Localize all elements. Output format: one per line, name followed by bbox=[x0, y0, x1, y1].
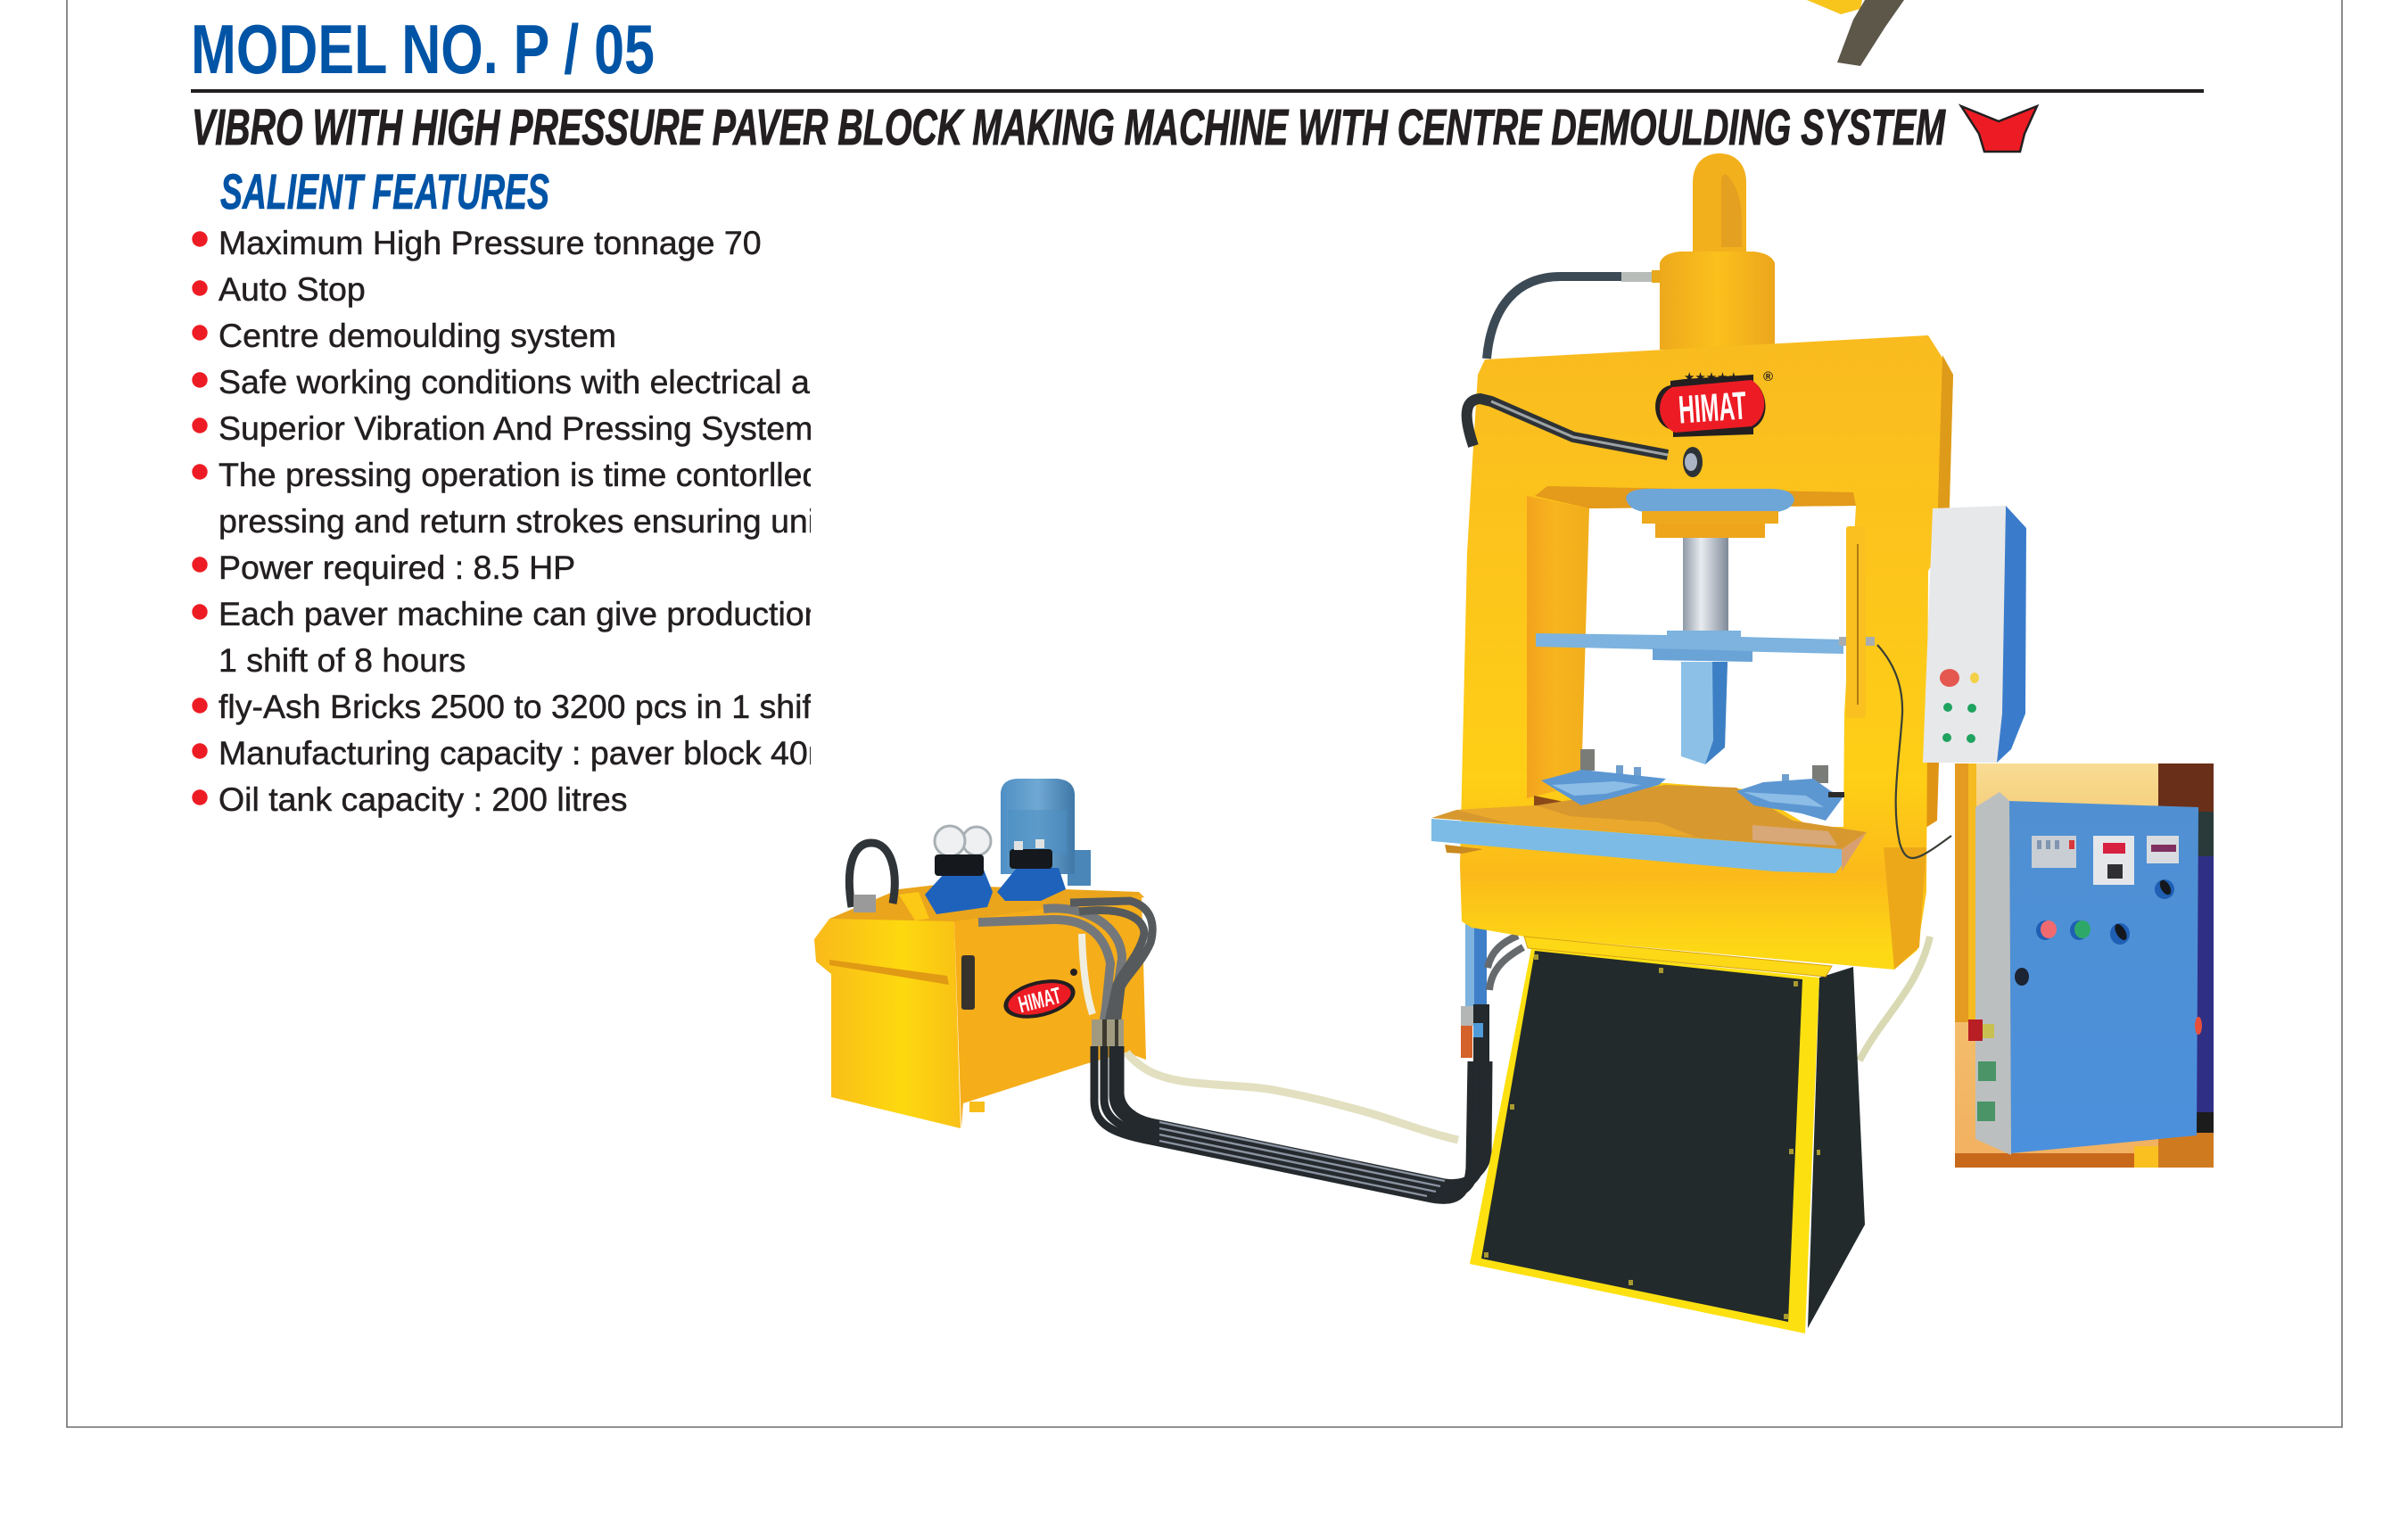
press control box bbox=[1923, 506, 2026, 763]
press bed bbox=[1431, 785, 1867, 873]
meter 3 bbox=[2147, 836, 2179, 863]
meter 2 bbox=[2093, 836, 2134, 885]
tank beige drain bbox=[1082, 934, 1093, 1014]
side terminals bbox=[1977, 1061, 1996, 1121]
inset background bbox=[1955, 764, 2214, 1168]
frame front bbox=[1460, 335, 1953, 970]
feature lines bbox=[219, 224, 836, 818]
heading: salient features: SALIENT FEATURES bbox=[220, 163, 549, 219]
selector knob top bbox=[2155, 879, 2174, 899]
panel side bbox=[1975, 792, 2011, 1155]
press main frame bbox=[1460, 335, 1953, 977]
valve cap 2 bbox=[1010, 849, 1052, 869]
tank foot bbox=[969, 1102, 985, 1112]
logo outline bbox=[1655, 375, 1766, 437]
yellow lamp bbox=[1970, 673, 1979, 683]
emergency stop bbox=[1968, 1019, 1983, 1041]
knob bottom grip bbox=[2113, 922, 2129, 942]
press column hoses and sleeve bbox=[1461, 923, 1523, 1061]
side red lamp bbox=[2195, 1017, 2202, 1035]
feature lines: 1 shift of 8 hours bbox=[219, 641, 466, 679]
stand yellow border bbox=[1470, 948, 1819, 1333]
inset floor bbox=[1955, 1153, 2158, 1168]
chrome rod bbox=[1683, 538, 1728, 632]
inset black strip bbox=[2197, 1112, 2214, 1133]
upper hose to cylinder bbox=[1487, 270, 1660, 359]
tank flange shadow bbox=[829, 960, 949, 985]
logo red field bbox=[1660, 380, 1764, 433]
lifting eye bbox=[1693, 153, 1746, 254]
feature lines: The pressing operation is time contorlled bbox=[219, 456, 821, 493]
press stand bbox=[1470, 948, 1865, 1333]
bed blue edge bbox=[1431, 819, 1842, 873]
bullets bbox=[192, 231, 208, 805]
selector knob bottom bbox=[2110, 923, 2130, 945]
dark grey outer hoses bbox=[1070, 901, 1152, 1026]
feature lines: pressing and return strokes ensuring uni bbox=[219, 502, 815, 540]
tank logo: HIMAT bbox=[1016, 982, 1064, 1018]
inner top face bbox=[1535, 486, 1856, 508]
hose highlights bbox=[1159, 1122, 1445, 1196]
blue disc bbox=[1626, 489, 1794, 513]
lower right shade bbox=[1884, 847, 1926, 970]
frame hose and fitting bbox=[1467, 399, 1703, 477]
motor box bbox=[1068, 850, 1091, 886]
filler cap bbox=[854, 895, 876, 912]
feature lines: Centre demoulding system bbox=[219, 317, 616, 354]
green push button bbox=[2074, 920, 2091, 938]
meter 2 display bbox=[2103, 843, 2125, 854]
bed right corner bbox=[1842, 832, 1867, 871]
inset dark upper strip bbox=[2197, 812, 2214, 856]
inset navy strip bbox=[2197, 856, 2214, 1112]
oil sight glass bbox=[961, 955, 975, 1010]
title: MODEL NO. P / 05 bbox=[191, 10, 655, 88]
red button bbox=[1940, 669, 1959, 687]
frame rear foot bbox=[1923, 763, 1939, 830]
demoulding finger bbox=[1681, 662, 1728, 764]
tank right face bbox=[954, 895, 1146, 1128]
motor fins bbox=[1008, 810, 1067, 854]
estop collar bbox=[1983, 1024, 1994, 1038]
deck yellow strap bbox=[899, 892, 929, 920]
finger edge bbox=[1705, 662, 1728, 764]
knob top grip bbox=[2157, 879, 2173, 896]
feature lines: Manufacturing capacity : paver block 40m bbox=[219, 734, 836, 772]
feature lines: Power required : 8.5 HP bbox=[219, 549, 575, 586]
press cylinder and lifting eye bbox=[1660, 153, 1775, 350]
hydraulic cylinder bbox=[1660, 252, 1775, 350]
left mould clamp bbox=[1541, 749, 1666, 805]
right beige hose bbox=[1860, 937, 1930, 1061]
title rule bbox=[191, 89, 2204, 93]
inset left wall bbox=[1955, 764, 1968, 1022]
under-left shadow bbox=[1534, 796, 1581, 810]
window opening bbox=[1581, 506, 1856, 827]
inset floor right bbox=[2158, 1133, 2214, 1168]
inset floor patch bbox=[2134, 1146, 2158, 1168]
lower block bbox=[1653, 648, 1752, 662]
valve cap 1 bbox=[935, 854, 984, 876]
door lock bbox=[2015, 968, 2029, 986]
feature list bbox=[192, 224, 836, 818]
feature lines: Auto Stop bbox=[219, 270, 366, 308]
crossbar bbox=[1536, 631, 1843, 654]
meter 2 switch bbox=[2107, 864, 2123, 879]
electric motor bbox=[1001, 779, 1075, 874]
icon: red arrow bbox=[1961, 106, 2037, 152]
oil tank power pack bbox=[814, 779, 1146, 1128]
sensor cable bbox=[1877, 645, 1951, 858]
bed light area bbox=[1456, 805, 1695, 837]
bed reflection bbox=[1752, 825, 1837, 846]
tank logo bbox=[1000, 973, 1079, 1025]
lower black hoses bbox=[1094, 1046, 1489, 1200]
feature lines: fly-Ash Bricks 2500 to 3200 pcs in 1 shift bbox=[219, 688, 821, 725]
eye recess bbox=[1721, 174, 1742, 247]
guide slot bbox=[1846, 526, 1866, 718]
right mould clamp bbox=[1736, 765, 1844, 821]
stand side bbox=[1808, 967, 1865, 1328]
clamp plate bbox=[1839, 637, 1875, 646]
meter 1 breaker bbox=[2069, 840, 2074, 849]
under-bed bracket bbox=[1445, 845, 1483, 854]
main logo: HIMAT bbox=[1655, 369, 1773, 437]
feature lines: Safe working conditions with electrical a bbox=[219, 363, 810, 400]
logo stars: ★★★★★ bbox=[1684, 370, 1739, 385]
beige return hose bbox=[1126, 1052, 1458, 1140]
valve block 1 bbox=[925, 863, 993, 914]
meter 1 switches bbox=[2037, 840, 2059, 849]
valve block 2 bbox=[997, 868, 1066, 901]
bed top bbox=[1431, 785, 1867, 849]
valve white plugs bbox=[1014, 839, 1044, 850]
feature lines: Each paver machine can give production bbox=[219, 595, 822, 632]
inner left face bbox=[1527, 496, 1589, 798]
inset left strip bbox=[1968, 764, 1976, 1022]
frame side shade bbox=[1937, 355, 1953, 535]
ram assembly bbox=[1536, 489, 1875, 764]
stand top lip bbox=[1524, 937, 1832, 977]
panel door bbox=[2009, 801, 2198, 1153]
pressure gauges bbox=[935, 826, 991, 856]
feature lines: Superior Vibration And Pressing System bbox=[219, 409, 812, 447]
inset photo: electrical panel bbox=[1955, 764, 2214, 1168]
flange steps bbox=[1642, 511, 1778, 524]
salmon button shadow bbox=[2036, 920, 2054, 940]
hydraulic hoses between tank and press bbox=[978, 901, 1489, 1200]
stand black panel bbox=[1481, 951, 1802, 1322]
logo wordmark: HIMAT bbox=[1678, 384, 1748, 433]
box blue side bbox=[1997, 506, 2026, 763]
manifold and grey hoses bbox=[978, 908, 1122, 1026]
panel bolts bbox=[1484, 954, 1820, 1319]
feature lines: Maximum High Pressure tonnage 70 bbox=[219, 224, 762, 261]
tank front face bbox=[814, 919, 961, 1128]
inset brown corner bbox=[2158, 764, 2214, 812]
tank top deck bbox=[829, 885, 1144, 924]
feature lines: Oil tank capacity : 200 litres bbox=[219, 780, 628, 818]
green button shadow bbox=[2070, 920, 2088, 940]
filler hose loop bbox=[849, 843, 895, 907]
green lamps bbox=[1942, 703, 1976, 743]
cropped machine foot at top bbox=[1807, 0, 1904, 66]
bar clamp bbox=[1851, 623, 1858, 660]
tank logo registered mark bbox=[1070, 969, 1077, 976]
meter 3 display bbox=[2151, 845, 2176, 852]
salmon push button bbox=[2041, 920, 2057, 938]
box white front bbox=[1923, 506, 2006, 763]
hose fittings bbox=[1092, 1019, 1124, 1046]
meter 1 bbox=[2032, 836, 2076, 868]
registered mark: ® bbox=[1763, 369, 1773, 384]
